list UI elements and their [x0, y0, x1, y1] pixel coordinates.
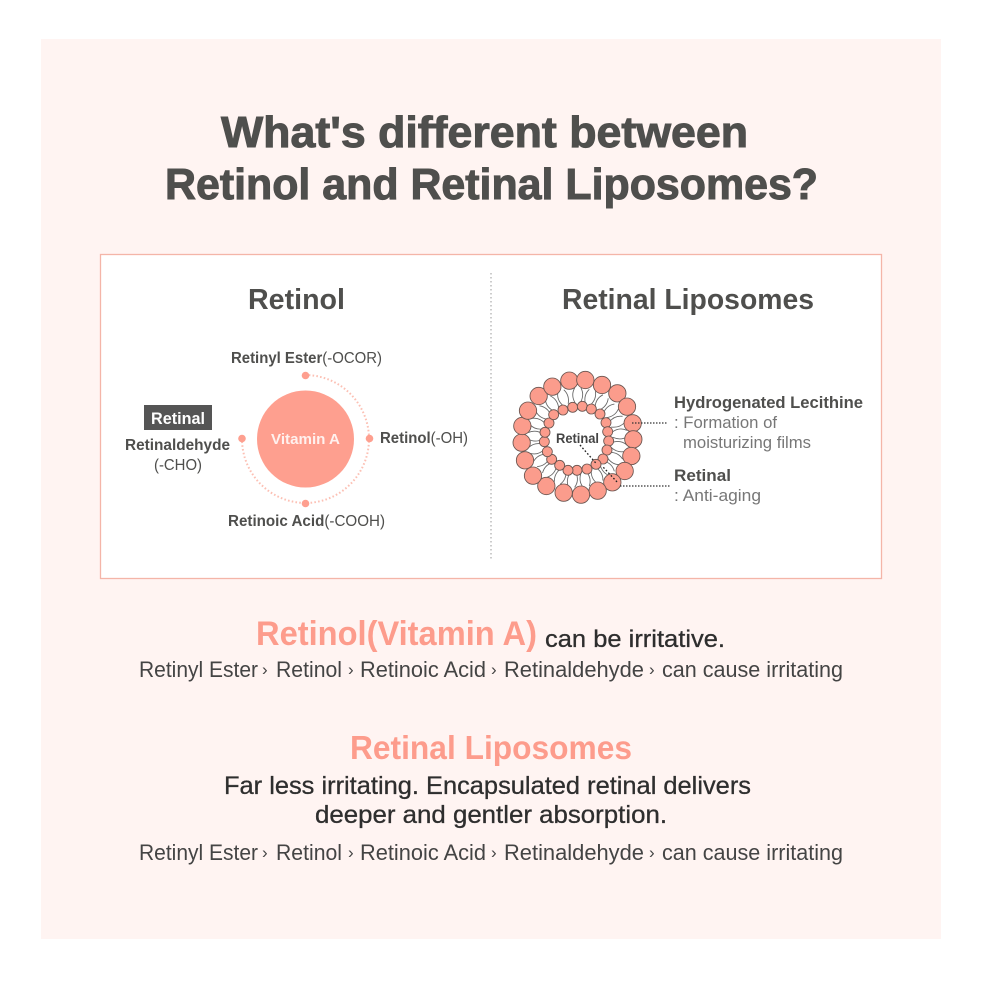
text block: retinal liposomes: Retinol	[276, 840, 342, 865]
text block: retinol: Retinol(Vitamin A)	[256, 615, 537, 653]
leader line: lecithine	[632, 422, 668, 424]
label: Retinyl Ester: Retinyl Ester(-OCOR)	[231, 350, 382, 367]
text block: retinal liposomes: Retinaldehyde	[504, 840, 644, 865]
text block: retinol: ›	[262, 660, 268, 679]
heading: Retinal Liposomes: Retinal Liposomes	[562, 284, 814, 316]
cycle node dots	[238, 372, 373, 507]
text block: retinal liposomes: Retinyl Ester	[139, 840, 258, 865]
lipid tails	[528, 388, 628, 488]
text block: retinal liposomes: Retinoic Acid	[360, 840, 486, 865]
text block: retinal liposomes: can cause irritating	[662, 840, 843, 865]
title: Retinol and Retinal Liposomes?	[165, 160, 818, 209]
text block: retinol	[139, 615, 843, 682]
label: Retinaldehyde	[125, 437, 230, 474]
label: Retinol: Retinol(-OH)	[380, 430, 468, 447]
liposome centre label: Retinal	[556, 431, 599, 446]
diagram: liposome	[513, 371, 670, 503]
Retinal tag	[144, 405, 212, 430]
text block: retinol: Retinoic Acid	[360, 657, 486, 682]
text block: retinol: Retinaldehyde	[504, 657, 644, 682]
Vitamin A circle	[257, 390, 354, 488]
text block: retinol: ›	[649, 660, 655, 679]
text block: retinal liposomes	[139, 729, 843, 865]
diagram: Vitamin A cycle	[125, 350, 468, 530]
title: What's different between	[221, 108, 748, 157]
label: Retinoic Acid: Retinoic Acid(-COOH)	[228, 513, 385, 530]
text block: retinol: can be irritative.	[545, 626, 725, 653]
heading: Retinol: Retinol	[248, 284, 345, 316]
text block: retinal liposomes: deeper and gentler absorption.	[315, 801, 667, 829]
leader line: retinal	[620, 485, 670, 487]
text block: retinal liposomes: ›	[491, 843, 497, 862]
label: Hydrogenated Lecithine	[674, 393, 863, 452]
text block: retinal liposomes: ›	[649, 843, 655, 862]
Retinal tag: Retinal	[151, 410, 205, 428]
inner lipid heads	[539, 401, 614, 475]
label: Retinaldehyde: Retinaldehyde	[125, 437, 230, 454]
outer lipid heads	[513, 371, 642, 503]
Vitamin A label: Vitamin A	[271, 431, 340, 448]
text block: retinol: ›	[491, 660, 497, 679]
text block: retinal liposomes: Far less irritating. Encapsulated retinal delivers	[224, 772, 751, 800]
label: Hydrogenated Lecithine: Hydrogenated Lecithine	[674, 393, 863, 412]
label: Retinal: Retinal	[674, 466, 731, 485]
label: Retinal	[674, 466, 761, 505]
comparison panel	[100, 254, 882, 578]
text block: retinal liposomes: Retinal Liposomes	[350, 729, 632, 766]
dotted arc	[242, 375, 369, 503]
text block: retinol: Retinyl Ester	[139, 657, 258, 682]
label: Hydrogenated Lecithine: : Formation of	[674, 413, 777, 432]
text block: retinol: ›	[348, 660, 354, 679]
text block: retinal liposomes: ›	[262, 843, 268, 862]
text block: retinol: Retinol	[276, 657, 342, 682]
label: Retinaldehyde: (-CHO)	[154, 457, 202, 474]
dotted pointers inside liposome	[580, 445, 618, 483]
title	[165, 108, 818, 209]
text block: retinal liposomes: ›	[348, 843, 354, 862]
label: Retinal: : Anti-aging	[674, 486, 761, 505]
label: Hydrogenated Lecithine: moisturizing films	[683, 433, 811, 452]
text block: retinol: can cause irritating	[662, 657, 843, 682]
